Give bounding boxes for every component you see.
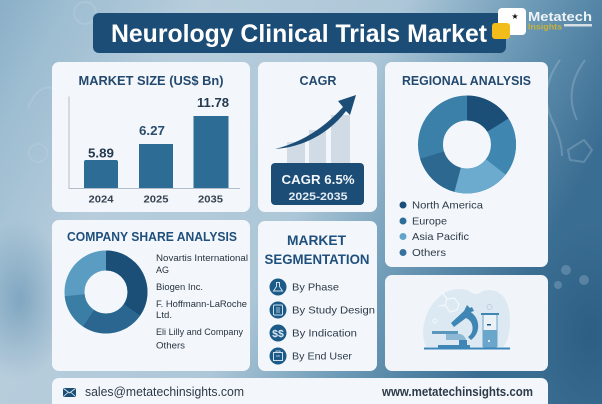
item: by end user	[270, 348, 352, 364]
panel: CAGR	[258, 62, 377, 212]
legend: companies: Others	[156, 340, 186, 350]
callout: CAGR value: 2025-2035	[288, 191, 348, 203]
chart: rising arrow with bars	[275, 95, 356, 164]
legend: companies: Eli Lilly and Company	[156, 327, 243, 337]
bar chart: 6.27	[139, 124, 165, 138]
panel: market segmentation	[258, 221, 377, 371]
legend: companies	[156, 253, 248, 350]
donut chart: regions	[430, 108, 504, 181]
icon: microscope and test tube	[423, 289, 510, 350]
bar chart: 2024	[88, 194, 114, 206]
icon: envelope	[63, 388, 76, 397]
title banner	[93, 13, 506, 53]
panel: laboratory illustration	[385, 275, 548, 371]
text: email: sales@metatechinsights.com	[85, 385, 244, 399]
bar chart: 5.89	[88, 146, 114, 160]
logo: Metatech Insights: Metatech	[528, 10, 592, 24]
legend: companies: AG	[156, 265, 169, 275]
legend: regions: Asia Pacific	[412, 231, 469, 243]
legend: companies: Novartis International	[156, 253, 248, 263]
heading: regional analysis: REGIONAL ANALYSIS	[402, 74, 531, 88]
title banner: Neurology Clinical Trials Market	[111, 20, 488, 48]
legend: companies: F. Hoffmann-LaRoche	[156, 299, 247, 309]
logo: Metatech Insights: Insights	[528, 22, 563, 32]
legend: companies: Ltd.	[156, 310, 172, 320]
panel: market size	[52, 62, 250, 212]
panel: contact footer	[52, 378, 548, 404]
donut chart: company share	[74, 260, 138, 324]
item: by indication: By Indication	[292, 328, 357, 340]
heading: CAGR: CAGR	[300, 74, 336, 88]
item: by study design: By Study Design	[292, 304, 375, 316]
item: by phase	[270, 278, 339, 296]
legend: regions: Europe	[412, 216, 447, 228]
panel: regional analysis	[385, 62, 548, 267]
callout: CAGR value	[271, 163, 364, 205]
bar chart: 2035	[198, 194, 223, 206]
legend: regions: Others	[412, 247, 446, 259]
legend: companies: Biogen Inc.	[156, 282, 203, 292]
bar chart: 11.78	[197, 96, 229, 110]
text: website: www.metatechinsights.com	[381, 385, 533, 399]
heading: company share analysis: COMPANY SHARE ANALYSIS	[67, 230, 237, 244]
item: by study design	[270, 302, 375, 318]
item: by end user: By End User	[292, 350, 352, 362]
legend: regions: North America	[412, 200, 483, 212]
callout: CAGR value: CAGR 6.5%	[282, 172, 355, 187]
heading: market segmentation	[264, 233, 370, 267]
item: by indication: $$	[272, 328, 284, 340]
logo: Metatech Insights: ★	[511, 12, 519, 21]
heading: market segmentation: SEGMENTATION	[264, 252, 370, 267]
item: by indication	[270, 324, 357, 342]
heading: market size: MARKET SIZE (US$ Bn)	[78, 74, 224, 88]
bar chart: 2025	[144, 194, 169, 206]
panel: company share analysis	[52, 220, 250, 371]
item: by phase: By Phase	[292, 282, 339, 294]
heading: market segmentation: MARKET	[287, 233, 347, 248]
bar chart	[69, 96, 240, 206]
logo: Metatech Insights	[492, 8, 592, 39]
legend: regions	[400, 200, 483, 259]
